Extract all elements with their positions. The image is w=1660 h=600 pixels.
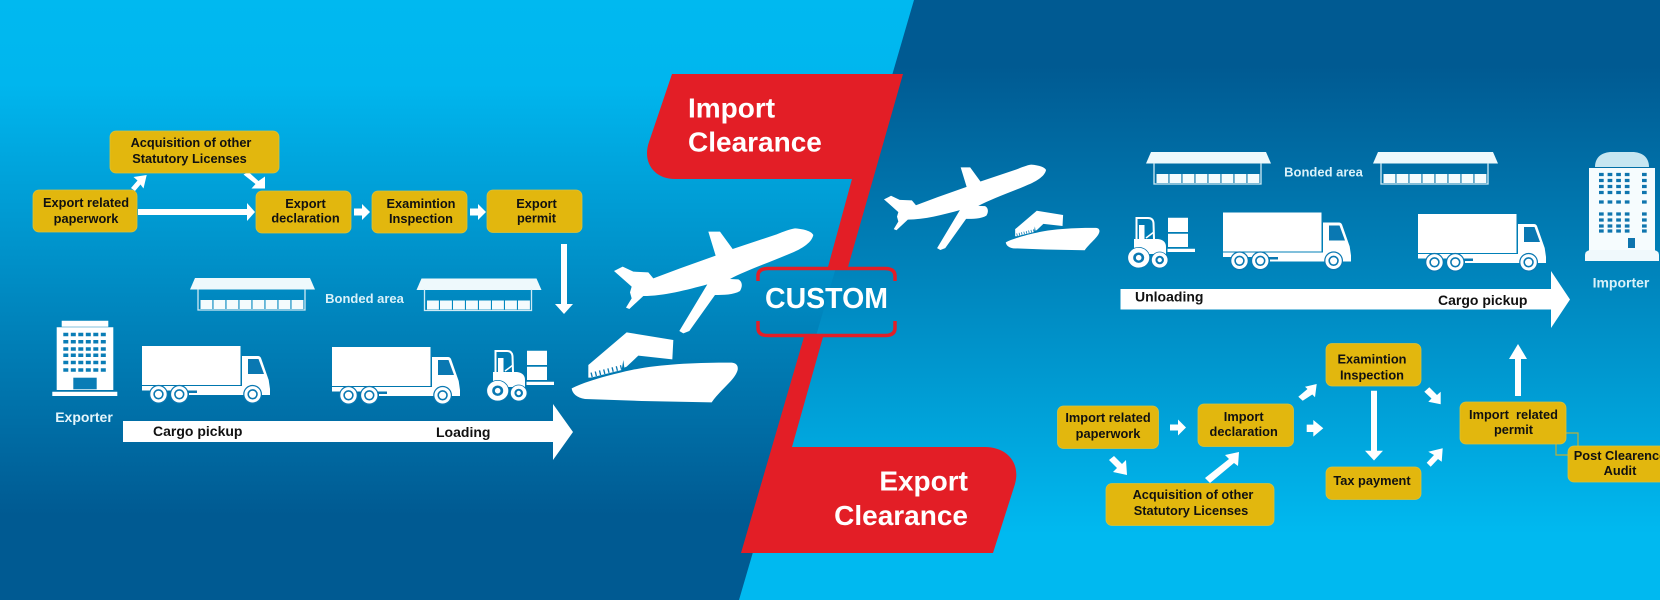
- background: import side: [739, 0, 1660, 600]
- export flowchart: declaration: [271, 210, 340, 226]
- icon: large plane: [614, 228, 813, 333]
- export flowchart: permit: [517, 210, 557, 226]
- icon: bonded warehouse left: [190, 278, 315, 310]
- arrow: import timeline: Unloading: [1135, 288, 1203, 304]
- heading: import clearance: Import: [688, 92, 775, 124]
- import flowchart: Examintion: [1338, 352, 1407, 366]
- import flowchart: [1058, 344, 1660, 526]
- import flowchart: Inspection: [1340, 368, 1404, 382]
- import flowchart: Import related: [1065, 410, 1151, 425]
- icon: truck loading: [332, 347, 460, 404]
- export flowchart: paperwork: [54, 211, 119, 226]
- export flowchart: Inspection: [389, 211, 453, 226]
- icon: small plane: [884, 165, 1046, 250]
- arrow: export timeline: Cargo pickup: [153, 423, 242, 439]
- import flowchart: Audit: [1604, 463, 1637, 478]
- import flowchart: declaration: [1210, 424, 1278, 439]
- import flowchart: Tax payment: [1333, 473, 1411, 488]
- export flowchart: Acquisition of other: [131, 135, 251, 150]
- export flowchart: Export: [285, 196, 327, 211]
- import flowchart: Import related: [1469, 407, 1558, 422]
- label: importer: Importer: [1593, 274, 1650, 290]
- heading: export clearance: Clearance: [834, 500, 968, 531]
- panel: export clearance red banner: [741, 337, 1016, 553]
- icon: large ship: [572, 332, 738, 402]
- icon: truck cargo pickup: [1418, 214, 1546, 271]
- icon: truck unloading: [1223, 212, 1351, 270]
- icon: forklift export: [487, 351, 554, 401]
- arrow: import timeline: [1120, 271, 1570, 328]
- import flowchart: permit: [1494, 422, 1534, 437]
- label: exporter: Exporter: [55, 409, 113, 425]
- icon: bonded warehouse import left: [1146, 152, 1271, 184]
- import flowchart: paperwork: [1076, 426, 1141, 441]
- arrow: export timeline: Loading: [436, 424, 490, 440]
- export flowchart: Export: [516, 196, 558, 211]
- import flowchart: Acquisition of other: [1133, 487, 1253, 502]
- import flowchart: Import: [1224, 409, 1264, 424]
- heading: export clearance: Export: [879, 466, 968, 496]
- import flowchart: Statutory Licenses: [1134, 503, 1248, 518]
- heading: import clearance: Clearance: [688, 126, 822, 158]
- export flowchart: Examintion: [387, 196, 456, 211]
- icon: forklift import: [1128, 218, 1195, 268]
- panel: import clearance red banner: [647, 74, 903, 267]
- export flowchart: [33, 131, 582, 233]
- export flowchart: Statutory Licenses: [132, 151, 247, 166]
- export flowchart: Export related: [43, 195, 129, 210]
- icon: small ship: [1006, 211, 1099, 250]
- custom badge: [758, 268, 895, 336]
- icon: importer building: [1585, 152, 1659, 261]
- arrow: import timeline: Cargo pickup: [1438, 292, 1527, 308]
- connector: permit to audit: [1556, 433, 1578, 455]
- icon: truck pickup: [142, 346, 270, 403]
- custom badge: CUSTOM: [765, 283, 888, 315]
- arrow: permit to loading: [555, 244, 573, 314]
- label: bonded area import: Bonded area: [1284, 164, 1364, 180]
- icon: bonded warehouse right: [416, 278, 542, 310]
- label: bonded area export: Bonded area: [325, 291, 405, 306]
- arrow: export timeline: [123, 404, 573, 460]
- icon: exporter building: [52, 321, 117, 396]
- icon: bonded warehouse import right: [1373, 152, 1498, 184]
